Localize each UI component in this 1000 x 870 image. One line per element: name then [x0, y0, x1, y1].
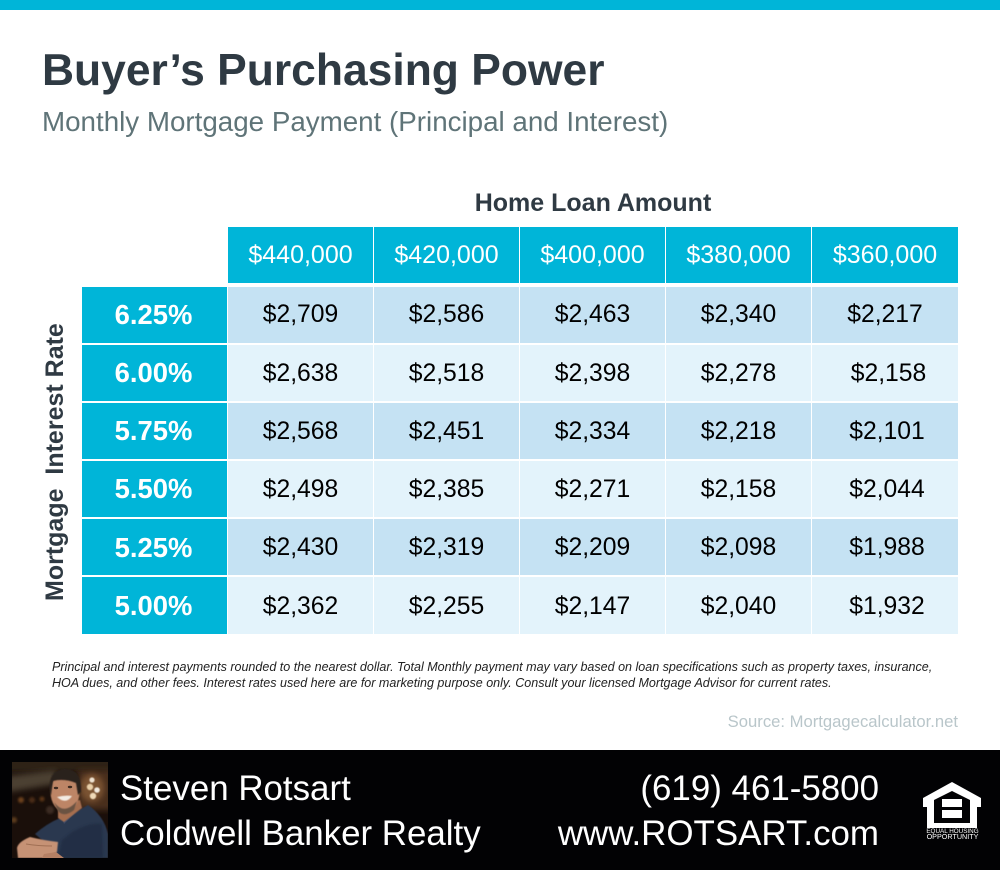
row 5.25%: 5.25%	[115, 532, 192, 562]
row 5.25%	[82, 519, 958, 575]
phone and website	[558, 769, 879, 853]
row 5.50%: $2,271	[555, 476, 630, 503]
row 6.00%: $2,638	[263, 360, 338, 387]
agent name and company: Steven Rotsart	[120, 769, 351, 808]
row 6.00%: $2,158	[851, 360, 926, 387]
icon: equal housing opportunity: OPPORTUNITY	[927, 832, 979, 841]
phone and website: (619) 461-5800	[640, 769, 879, 808]
agent name and company: Coldwell Banker Realty	[120, 814, 481, 853]
row axis heading: Mortgage Interest Rate: Mortgage Interest Rate	[41, 323, 69, 601]
row 5.50%: $2,158	[701, 476, 776, 503]
row 5.75%: $2,451	[409, 418, 484, 445]
row 6.00%	[82, 345, 958, 401]
row 5.75%: $2,334	[555, 418, 630, 445]
row 5.50%	[82, 461, 958, 517]
row 5.25%: $1,988	[849, 534, 925, 561]
row 6.25%: $2,463	[555, 301, 630, 328]
row 5.25%: $2,209	[555, 534, 630, 561]
row 5.00%: $1,932	[849, 592, 925, 620]
agent photo	[12, 762, 108, 858]
icon: equal housing opportunity	[923, 782, 981, 841]
column headers: $360,000	[833, 240, 937, 268]
disclaimer text	[52, 660, 932, 690]
disclaimer text: HOA dues, and other fees. Interest rates used here are for marketing purpose only. Consult your licensed Mortgage Advisor for current rates.	[52, 676, 832, 690]
column headers	[228, 227, 958, 283]
row 5.75%: $2,568	[263, 418, 338, 445]
title: Buyer’s Purchasing Power	[42, 46, 604, 95]
row 6.00%: $2,398	[555, 360, 630, 387]
row 6.25%: $2,340	[701, 301, 776, 328]
row 5.25%: $2,098	[701, 534, 776, 561]
subtitle: Monthly Mortgage Payment (Principal and Interest)	[42, 106, 668, 137]
row 5.00%: $2,362	[263, 592, 338, 620]
row 6.25%: $2,217	[847, 301, 923, 328]
column headers: $420,000	[394, 240, 499, 268]
row 5.50%: 5.50%	[115, 473, 192, 504]
row 5.50%: $2,498	[263, 476, 338, 503]
row 5.00%: $2,040	[701, 592, 776, 620]
row 6.00%: $2,518	[409, 360, 484, 387]
row 5.25%: $2,430	[263, 534, 338, 561]
agent name and company	[120, 769, 481, 853]
row 5.00%: $2,147	[555, 592, 630, 620]
row 5.50%: $2,044	[849, 476, 925, 503]
column headers: $440,000	[248, 240, 353, 268]
phone and website: www.ROTSART.com	[558, 814, 879, 853]
row 5.00%: 5.00%	[115, 590, 192, 620]
payment table	[82, 227, 958, 634]
row 6.00%: 6.00%	[115, 357, 192, 388]
row 5.75%	[82, 403, 958, 459]
footer band	[0, 750, 1000, 870]
row 5.75%: $2,218	[701, 418, 776, 445]
column headers: $400,000	[540, 240, 645, 268]
icon: equal housing opportunity: EQUAL HOUSING	[926, 828, 979, 835]
column axis heading: Home Loan Amount: Home Loan Amount	[475, 189, 711, 217]
row 6.25%: 6.25%	[115, 299, 192, 330]
disclaimer text: Principal and interest payments rounded to the nearest dollar. Total Monthly payment may vary based on loan specifications such as property taxes, insurance,	[52, 660, 932, 674]
row 6.00%: $2,278	[701, 360, 776, 387]
row 5.75%: $2,101	[849, 418, 925, 445]
row 5.75%: 5.75%	[115, 415, 192, 446]
column headers: $380,000	[686, 240, 791, 268]
row 6.25%: $2,709	[263, 301, 338, 328]
row 5.25%: $2,319	[409, 534, 484, 561]
source credit: Source: Mortgagecalculator.net	[728, 712, 958, 731]
top accent bar	[0, 0, 1000, 10]
row 5.00%: $2,255	[409, 592, 484, 620]
row 6.25%	[82, 287, 958, 343]
row 5.00%	[82, 577, 958, 634]
row 6.25%: $2,586	[409, 301, 484, 328]
row 5.50%: $2,385	[409, 476, 484, 503]
